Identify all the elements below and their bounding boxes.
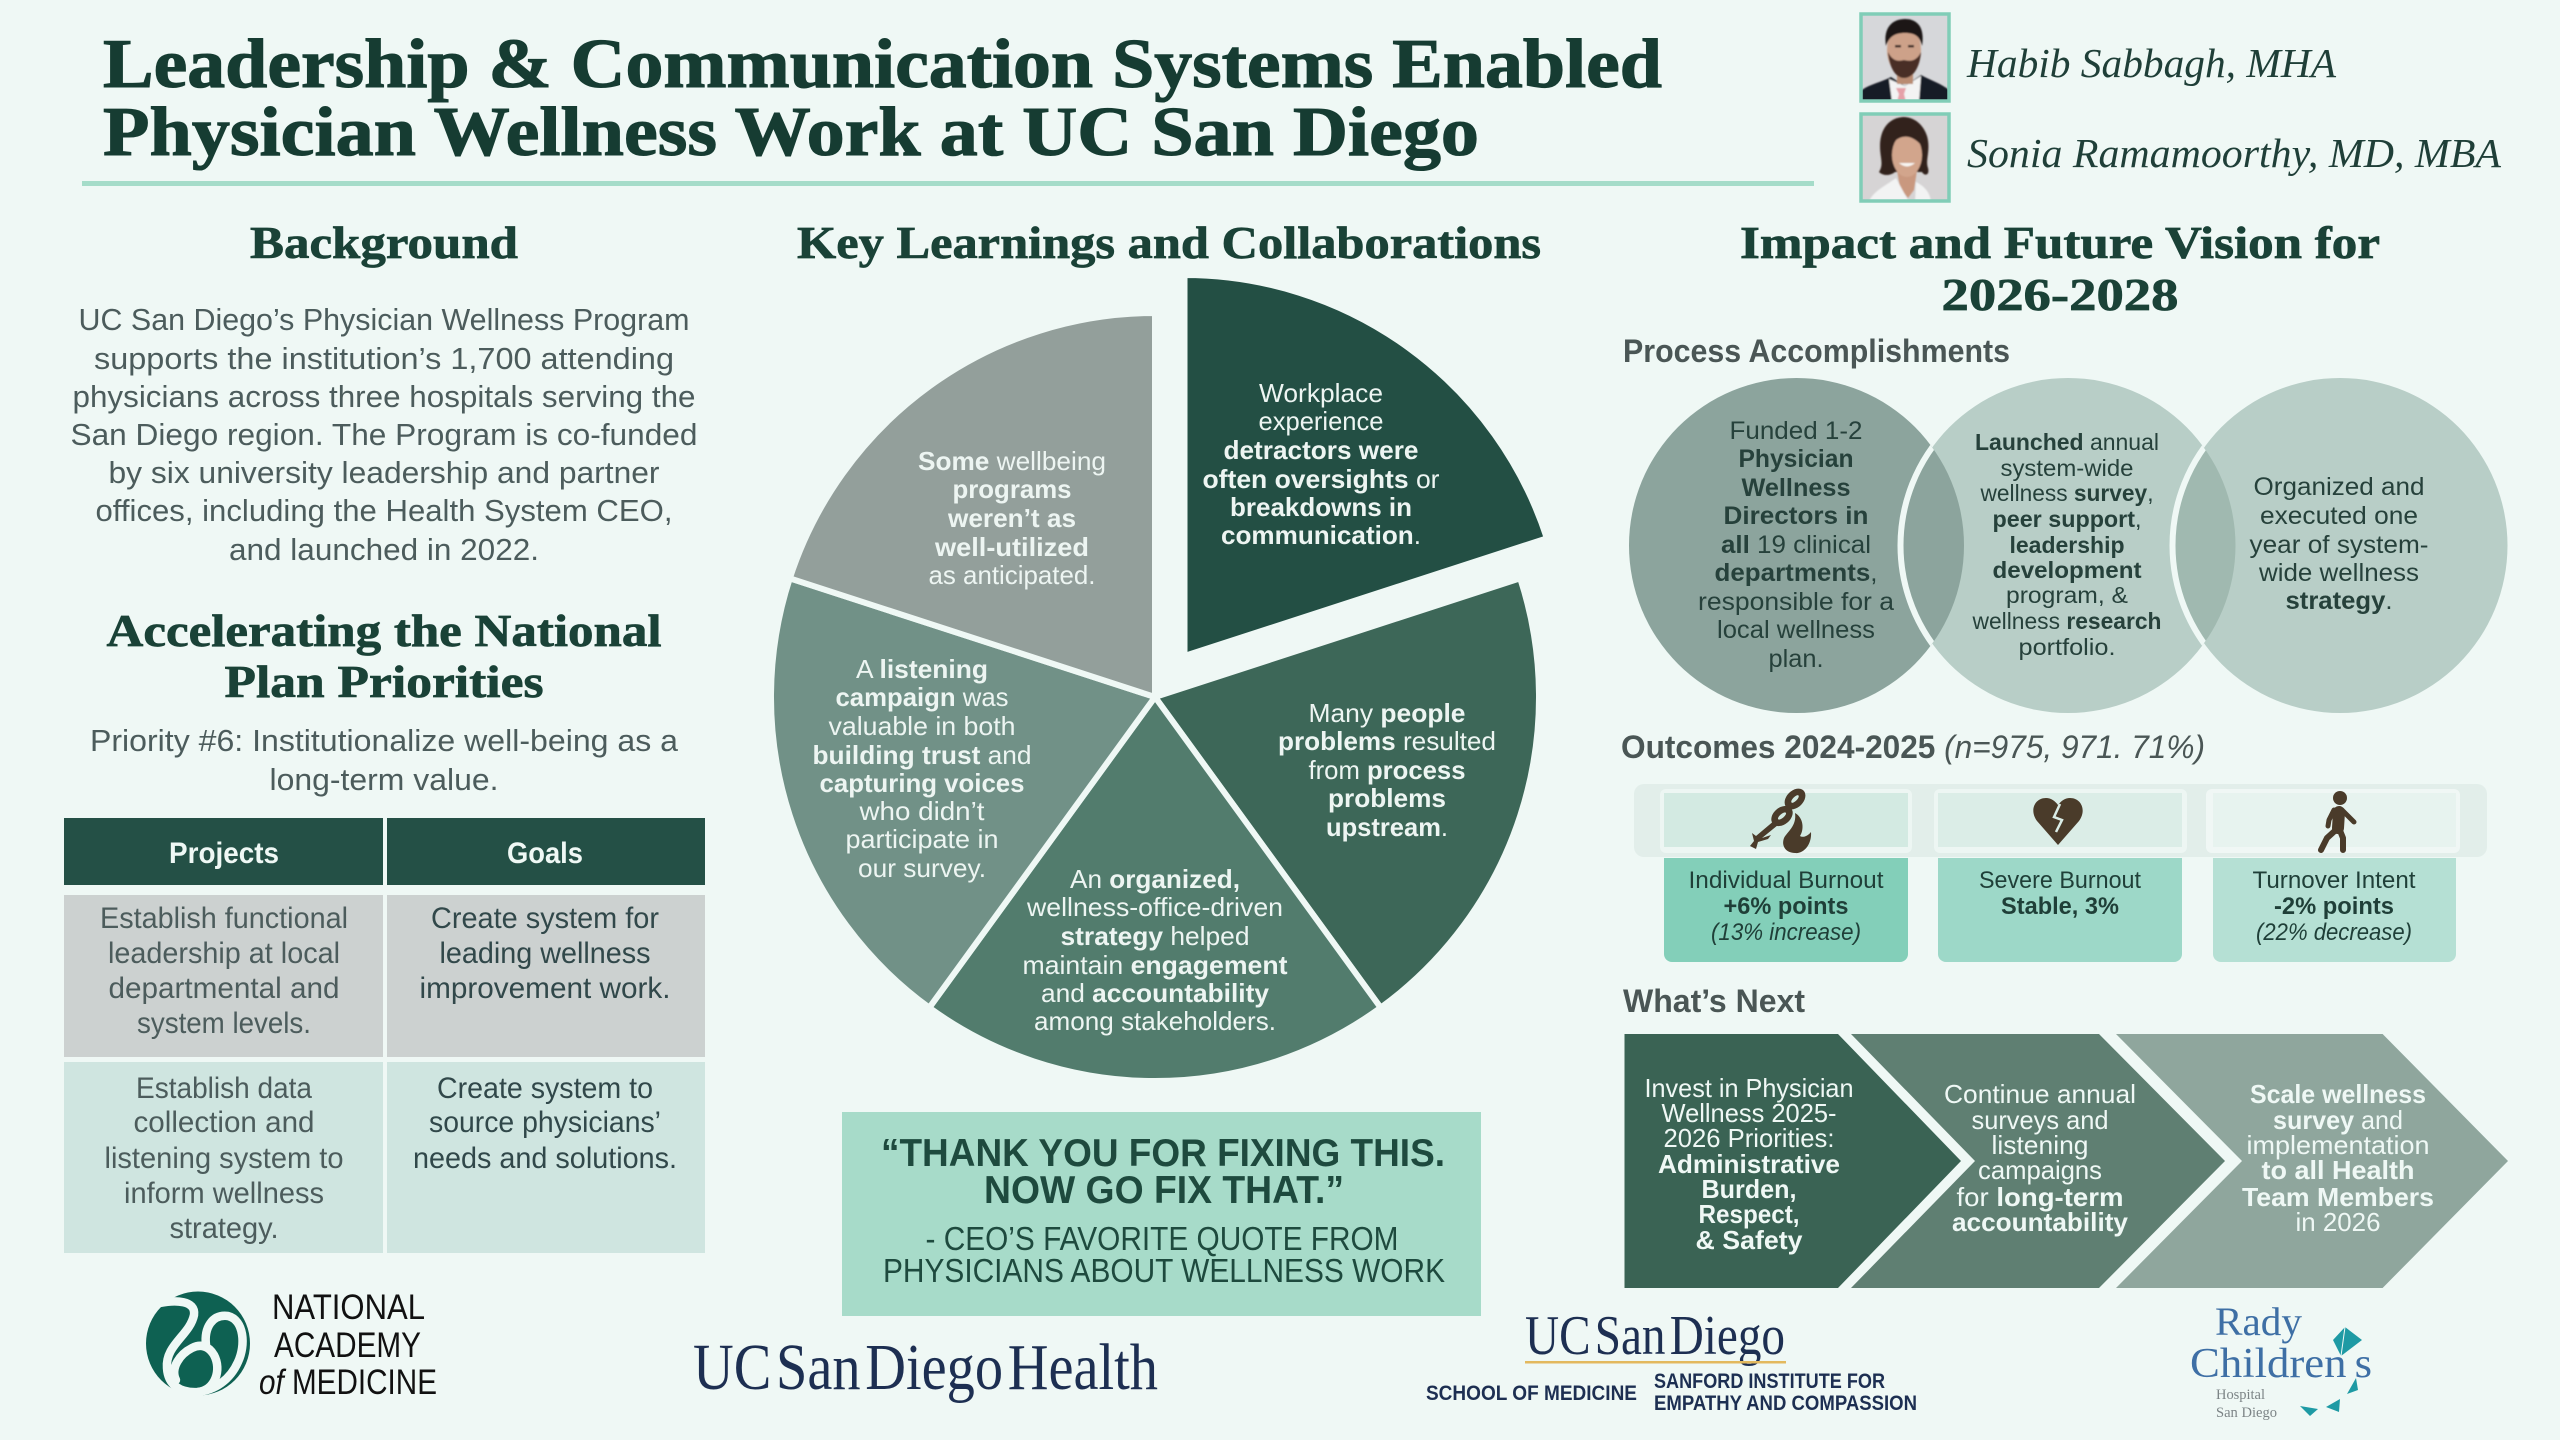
background text: and launched in 2022. [229, 532, 539, 567]
chevron: invest in priorities: Wellness 2025- [1662, 1098, 1836, 1128]
background text [70, 302, 698, 567]
priority statement: Priority #6: Institutionalize well-being as a [90, 723, 679, 758]
table: projects and goals: Create system for [431, 902, 659, 935]
text: annual survey and portfolio: leadership [2010, 532, 2124, 558]
chevron: continue surveys: listening [1992, 1130, 2088, 1160]
slice: people problems: from process [1308, 755, 1466, 785]
chevron: scale survey: implementation [2246, 1130, 2430, 1160]
logo: UC San Diego School of Medicine and Sanford Institute: EMPATHY AND COMPASSION [1654, 1392, 1917, 1415]
icon: broken heart [2033, 798, 2083, 845]
logo: National Academy of Medicine [146, 1288, 437, 1402]
slice: workplace experience: experience [1258, 406, 1384, 436]
callout: CEO quote [842, 1112, 1481, 1316]
slice: listening campaign: who didn’t [858, 796, 985, 826]
background text: physicians across three hospitals serving the [72, 379, 696, 414]
text: physician wellness directors: responsible for a [1698, 588, 1894, 616]
chevron: continue surveys: Continue annual [1944, 1079, 2136, 1109]
text: physician wellness directors: Physician [1738, 445, 1854, 473]
priority statement: long-term value. [270, 762, 498, 797]
slice: listening campaign: building trust and [812, 740, 1032, 770]
table: projects and goals: Establish functional [100, 902, 348, 935]
table: projects and goals: Projects [169, 837, 279, 870]
heading: impact and future vision [1740, 217, 2380, 320]
card: individual burnout: (13% increase) [1711, 919, 1861, 946]
slice: underused programs [790, 313, 1155, 697]
chevron: invest in priorities: Administrative [1658, 1149, 1840, 1179]
slice: organized strategy: strategy helped [1060, 921, 1250, 951]
logo: Rady Children's: Hospital [2216, 1387, 2265, 1403]
slice: underused programs: Some wellbeing [918, 446, 1106, 476]
table: projects and goals: listening system to [104, 1142, 344, 1175]
chevron: scale survey: in 2026 [2296, 1207, 2380, 1237]
text: annual survey and portfolio: system-wide [2000, 455, 2134, 481]
heading: accelerating the national plan priorities: Accelerating the National [106, 605, 662, 656]
chevron: continue surveys: accountability [1952, 1207, 2129, 1237]
table: projects and goals: Establish data [136, 1072, 312, 1105]
table: projects and goals: strategy. [170, 1212, 278, 1245]
table: projects and goals: leading wellness [440, 937, 650, 970]
background text: UC San Diego’s Physician Wellness Program [78, 302, 690, 337]
logo: Rady Children's [2190, 1299, 2372, 1421]
heading: impact and future vision: Impact and Future Vision for [1740, 217, 2380, 268]
slice: organized strategy [929, 697, 1381, 1081]
slice: listening campaign: our survey. [858, 853, 986, 883]
chevron: invest in priorities: Respect, [1698, 1199, 1800, 1229]
chevron: invest in priorities [1624, 1034, 1961, 1288]
chevron: continue surveys: surveys and [1972, 1105, 2108, 1135]
background text: offices, including the Health System CEO, [96, 493, 672, 528]
text: physician wellness directors: all 19 clinical [1721, 531, 1871, 559]
subheading: outcomes: Outcomes 2024-2025 (n=975, 971. 71%) [1621, 729, 2205, 765]
card: turnover intent: (22% decrease) [2256, 919, 2412, 946]
text: annual survey and portfolio: wellness research [1972, 608, 2162, 634]
subheading: what's next: What’s Next [1623, 983, 1805, 1019]
text: physician wellness directors: plan. [1768, 645, 1824, 673]
logo: National Academy of Medicine: NATIONAL [272, 1288, 425, 1327]
logo: Rady Children's: Children's [2190, 1341, 2372, 1387]
chevron: scale survey: survey and [2273, 1105, 2403, 1135]
callout: CEO quote: “THANK YOU FOR FIXING THIS. [881, 1132, 1445, 1175]
panel: background [70, 217, 698, 567]
background text: San Diego region. The Program is co-funded [70, 417, 698, 452]
photo: Habib Sabbagh [1861, 14, 1949, 102]
table: projects and goals: needs and solutions. [413, 1142, 677, 1175]
table: projects and goals [64, 818, 705, 1253]
slice: people problems [1155, 578, 1539, 1008]
table: projects and goals: source physicians’ [429, 1106, 661, 1139]
chevron: scale survey [2116, 1034, 2508, 1288]
table: projects and goals: collection and [134, 1106, 314, 1139]
text: annual survey and portfolio: Launched annual [1975, 429, 2159, 455]
card: turnover intent: Turnover Intent [2252, 867, 2416, 894]
logo: UC San Diego Health: UC San Diego Health [693, 1331, 1158, 1404]
table: projects and goals: Create system to [437, 1072, 653, 1105]
slice: workplace experience: breakdowns in [1230, 492, 1412, 522]
slice: organized strategy: and accountability [1041, 978, 1270, 1008]
callout: CEO quote: PHYSICIANS ABOUT WELLNESS WORK [883, 1252, 1445, 1289]
slice: listening campaign: participate in [846, 824, 998, 854]
text: physician wellness directors: Funded 1-2 [1730, 417, 1862, 445]
heading: accelerating the national plan priorities [106, 605, 662, 707]
text: wellness strategy: wide wellness [2258, 559, 2419, 587]
slice: underused programs: as anticipated. [928, 560, 1096, 590]
slice: workplace experience: often oversights or [1202, 464, 1440, 494]
heading: accelerating the national plan priorities: Plan Priorities [224, 656, 544, 707]
slice: people problems: problems [1328, 783, 1446, 813]
text: wellness strategy: year of system- [2250, 531, 2428, 559]
text: physician wellness directors: Wellness [1742, 474, 1850, 502]
name: Habib Sabbagh: Habib Sabbagh, MHA [1966, 40, 2337, 86]
chevron: invest in priorities: Burden, [1702, 1174, 1796, 1204]
slice: underused programs: weren’t as [947, 503, 1076, 533]
callout: CEO quote: NOW GO FIX THAT.” [984, 1169, 1344, 1212]
photo: Sonia Ramamoorthy [1861, 114, 1949, 202]
slice: people problems: problems resulted [1278, 726, 1496, 756]
slice: listening campaign [771, 578, 1155, 1008]
panel: impact and future vision [1621, 217, 2508, 1288]
title: Physician Wellness Work at UC San Diego [103, 94, 1479, 171]
slice: workplace experience: communication. [1221, 520, 1421, 550]
logo: National Academy of Medicine: of MEDICINE [259, 1363, 437, 1402]
card: individual burnout [1664, 858, 1908, 962]
authors [1861, 14, 2502, 202]
background text: supports the institution’s 1,700 attending [94, 341, 674, 376]
slice: listening campaign: campaign was [836, 682, 1008, 712]
chevron: scale survey: to all Health [2262, 1155, 2414, 1185]
outcomes icon bar [1634, 784, 2487, 857]
slice: workplace experience [1184, 275, 1547, 656]
slice: organized strategy: maintain engagement [1022, 950, 1288, 980]
card: individual burnout: Individual Burnout [1688, 867, 1884, 894]
text: physician wellness directors [1698, 417, 1894, 673]
text: annual survey and portfolio: development [1992, 557, 2142, 583]
heading: key learnings and collaborations: Key Learnings and Collaborations [797, 217, 1541, 268]
text: wellness strategy: executed one [2260, 502, 2418, 530]
logo: UC San Diego School of Medicine and Sanford Institute: SCHOOL OF MEDICINE [1426, 1382, 1637, 1405]
text: physician wellness directors: Directors in [1724, 502, 1868, 530]
text: wellness strategy: Organized and [2254, 473, 2424, 501]
venn: process accomplishments [1629, 378, 2508, 713]
slice: organized strategy: wellness-office-driven [1026, 892, 1283, 922]
table: projects and goals: system levels. [137, 1007, 311, 1040]
slice: people problems: Many people [1308, 698, 1466, 728]
icon: walking person [2321, 791, 2354, 850]
table: projects and goals: improvement work. [420, 972, 670, 1005]
text: wellness strategy [2250, 473, 2428, 615]
logo: UC San Diego School of Medicine and Sanford Institute: UC San Diego [1525, 1305, 1785, 1367]
slice: underused programs: programs [952, 474, 1072, 504]
slice: listening campaign: valuable in both [828, 711, 1016, 741]
text: annual survey and portfolio: peer support, [1992, 506, 2142, 532]
text: annual survey and portfolio: program, & [2006, 582, 2128, 608]
slice: organized strategy: among stakeholders. [1034, 1006, 1276, 1036]
text: annual survey and portfolio: wellness survey, [1980, 480, 2154, 506]
card: severe burnout: Severe Burnout [1979, 867, 2141, 894]
card: turnover intent [2213, 858, 2456, 962]
text: annual survey and portfolio [1972, 429, 2162, 660]
slice: workplace experience: Workplace [1259, 378, 1383, 408]
subheading: process accomplishments: Process Accomplishments [1623, 333, 2010, 369]
slice: people problems: upstream. [1326, 812, 1448, 842]
slice: underused programs: well-utilized [934, 532, 1089, 562]
callout: CEO quote: - CEO’S FAVORITE QUOTE FROM [926, 1220, 1398, 1257]
name: Sonia Ramamoorthy: Sonia Ramamoorthy, MD, MBA [1967, 130, 2502, 176]
slice: listening campaign: A listening [856, 654, 988, 684]
table: projects and goals: departmental and [108, 972, 340, 1005]
priority statement [90, 723, 679, 797]
card: severe burnout [1938, 858, 2182, 962]
heading: impact and future vision: 2026-2028 [1942, 269, 2178, 320]
panel: key learnings [771, 217, 1547, 1316]
title [103, 26, 1662, 171]
chevron: invest in priorities: & Safety [1696, 1225, 1803, 1255]
logo: National Academy of Medicine: ACADEMY [274, 1326, 421, 1365]
logo: UC San Diego School of Medicine and Sanford Institute [1426, 1305, 1917, 1415]
title: Leadership & Communication Systems Enabled [103, 26, 1662, 103]
logo: UC San Diego School of Medicine and Sanford Institute: SANFORD INSTITUTE FOR [1654, 1370, 1885, 1393]
logo: Rady Children's: San Diego [2216, 1405, 2277, 1421]
chevron: continue surveys: for long-term [1956, 1182, 2124, 1212]
chevron: scale survey: Scale wellness [2250, 1079, 2426, 1109]
chevron: continue surveys: campaigns [1978, 1155, 2102, 1185]
chevron: invest in priorities: Invest in Physician [1644, 1073, 1854, 1103]
text: wellness strategy: strategy. [2286, 587, 2392, 615]
heading: background: Background [250, 217, 518, 268]
text: physician wellness directors: local wellness [1717, 616, 1875, 644]
table: projects and goals: inform wellness [124, 1177, 324, 1210]
chevron: invest in priorities: 2026 Priorities: [1664, 1123, 1834, 1153]
panel: national plan priorities [64, 605, 705, 1253]
slice: organized strategy: An organized, [1070, 864, 1240, 894]
card: severe burnout: Stable, 3% [2001, 893, 2119, 920]
slice: listening campaign: capturing voices [820, 768, 1024, 798]
pie chart [771, 275, 1547, 1081]
text: physician wellness directors: departments, [1714, 559, 1878, 587]
logo: Rady Children's: Rady [2215, 1299, 2302, 1344]
card: turnover intent: -2% points [2274, 893, 2394, 920]
table: projects and goals: leadership at local [108, 937, 340, 970]
text: annual survey and portfolio: portfolio. [2018, 634, 2116, 660]
icon: burning chain [1750, 785, 1811, 853]
chevron: scale survey: Team Members [2242, 1182, 2434, 1212]
card: individual burnout: +6% points [1724, 893, 1848, 920]
slice: workplace experience: detractors were [1224, 435, 1418, 465]
table: projects and goals: Goals [507, 837, 583, 870]
background text: by six university leadership and partner [108, 455, 660, 490]
chevron: continue surveys [1851, 1034, 2225, 1288]
